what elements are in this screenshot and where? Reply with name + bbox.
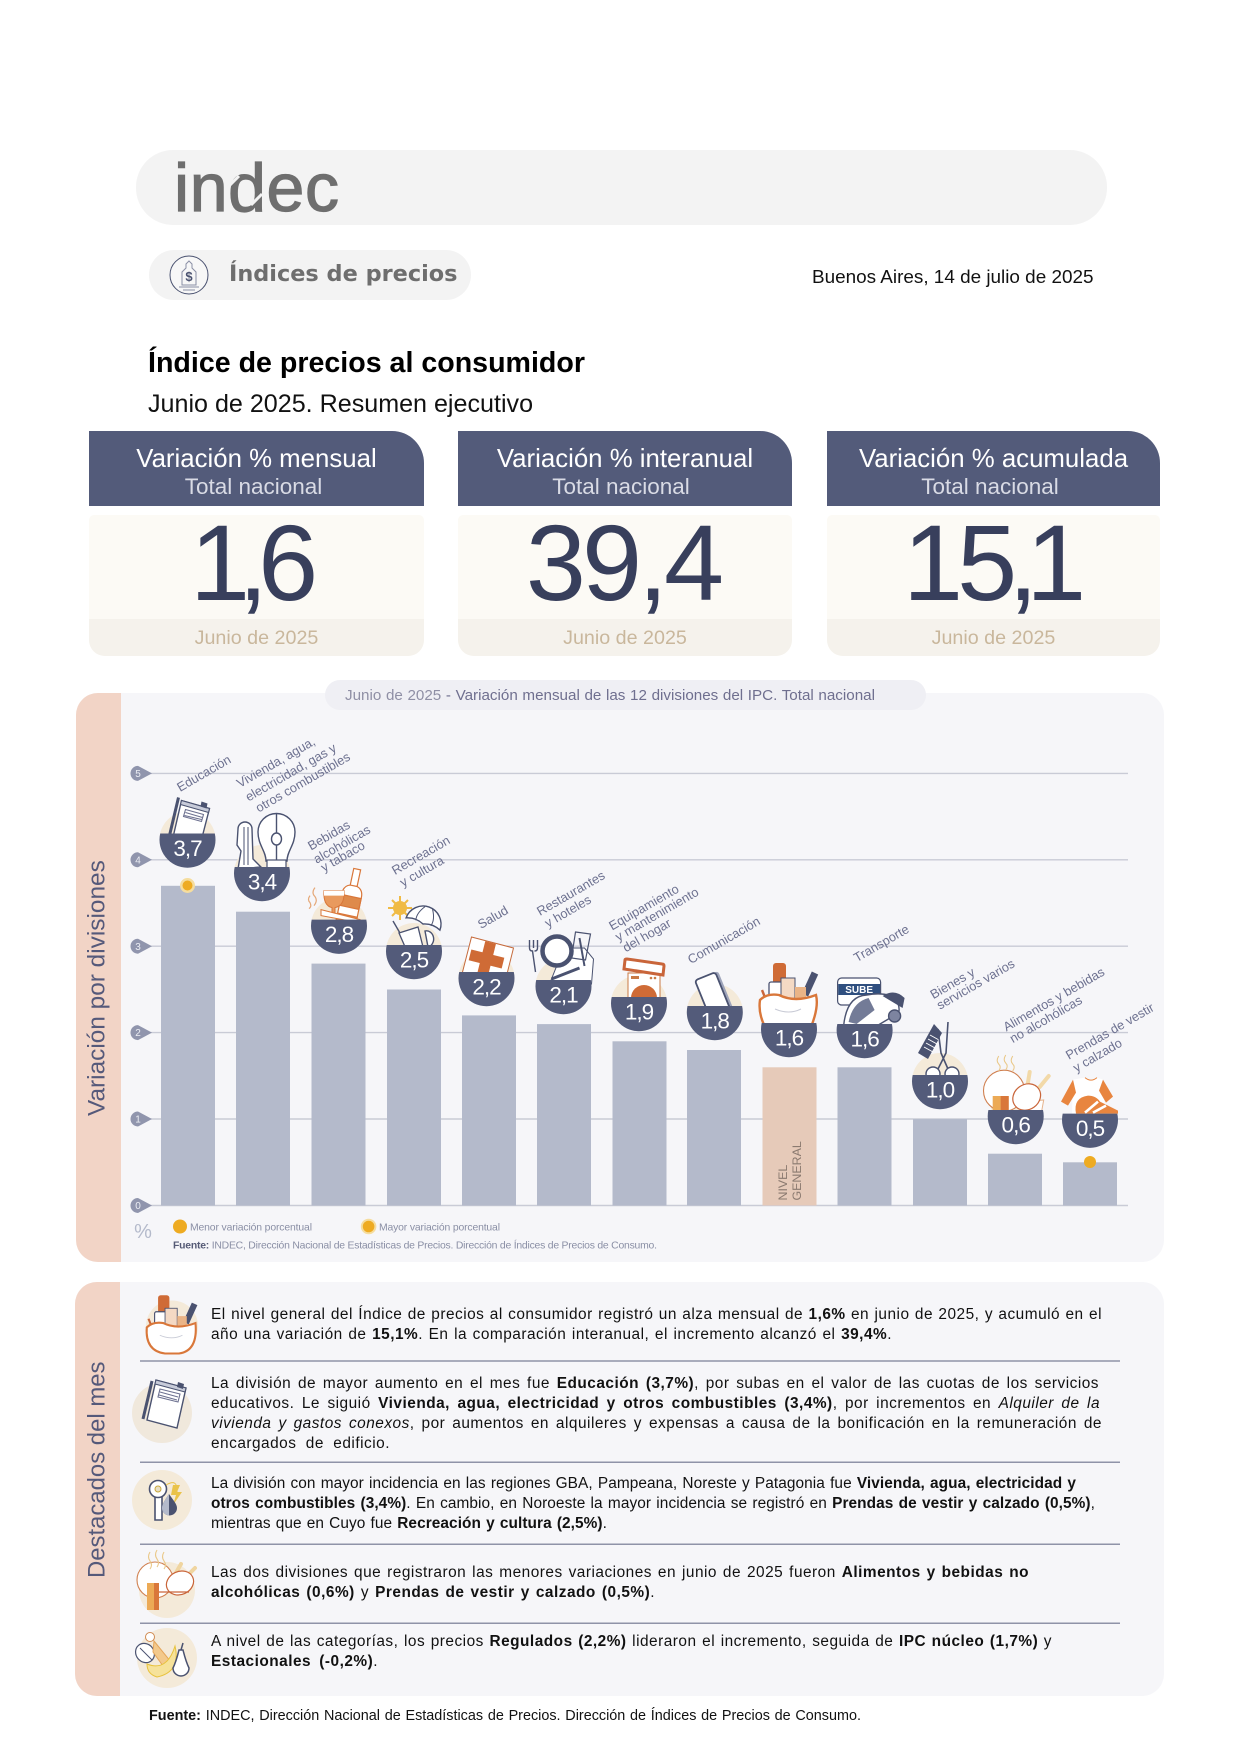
text: categorías: Estacionales (-0,2%). — [211, 1653, 378, 1670]
icon: notebook — [132, 1380, 192, 1443]
vertical heading: Variación por divisiones — [84, 860, 110, 1116]
division: Alimentos — [984, 1055, 1049, 1144]
label: Bebidas: alcohólicas — [311, 822, 373, 866]
label: Alimentos: no alcohólicas — [1007, 992, 1085, 1046]
text: mayor aumento — [211, 1375, 1102, 1452]
label: Comunicación: Comunicación — [685, 913, 763, 967]
date: Buenos Aires, 14 de julio de 2025 — [812, 267, 1093, 288]
legend: Menor variación porcentual — [190, 1222, 312, 1234]
y axis ticks — [131, 766, 152, 1213]
label: Transporte: Transporte — [851, 921, 912, 965]
text: nivel general: año una variación de 15,1%. En la comparación interanual, el incremento alcanzó el 39,4%. — [211, 1326, 892, 1343]
division: Equipamiento — [611, 959, 667, 1031]
title: Índice de precios al consumidor — [148, 347, 585, 379]
division: Recreación — [386, 896, 446, 979]
division: Restaurantes — [530, 932, 594, 1014]
card: interanual value: Junio de 2025 — [563, 627, 687, 649]
label: Prendas: y calzado — [1070, 1035, 1125, 1075]
division: Prendas: 0,5 — [1076, 1116, 1105, 1141]
y axis ticks: 3 — [135, 942, 141, 953]
card: acumulada header — [827, 431, 1160, 506]
division: Equipamiento: 1,9 — [625, 1000, 654, 1024]
bar label: nivel general: NIVEL — [776, 1165, 790, 1200]
card: interanual header: Total nacional — [552, 474, 690, 499]
text: categorías — [211, 1633, 1052, 1670]
subtitle: Junio de 2025. Resumen ejecutivo — [148, 390, 533, 418]
card: interanual header: Variación % interanual — [497, 445, 753, 473]
label: Vivienda: otros combustibles — [253, 749, 353, 815]
card: mensual header: Variación % mensual — [136, 445, 377, 473]
card: mensual value — [89, 515, 424, 656]
bar chart — [161, 886, 1117, 1206]
label: Vivienda — [234, 734, 353, 815]
marker: menor variación — [1084, 1156, 1096, 1168]
y axis ticks: 5 — [135, 769, 141, 780]
y axis ticks: 4 — [135, 855, 141, 866]
text: mayor incidencia: otros combustibles (3,4%). En cambio, en Noroeste la mayor incidencia se registró en Prendas de vestir y calzado (0,5%), — [211, 1495, 1095, 1512]
label: Equipamiento: Equipamiento — [606, 881, 681, 933]
division: Educación: 3,7 — [173, 836, 202, 861]
division: Recreación: 2,5 — [400, 948, 429, 972]
division: Salud — [458, 937, 514, 1006]
tag: Índices de precios — [149, 250, 471, 300]
text: nivel general — [211, 1305, 1102, 1343]
legend — [173, 1220, 500, 1234]
marker: mayor variación — [180, 878, 195, 893]
y axis ticks: 2 — [135, 1028, 141, 1039]
legend: Mayor variación porcentual — [379, 1222, 500, 1234]
label: Vivienda: electricidad, gas y — [243, 740, 339, 804]
y axis ticks: 0 — [135, 1201, 141, 1212]
label: Salud: Salud — [475, 902, 511, 932]
chart source: Fuente: INDEC, Dirección Nacional de Estadísticas de Precios. Dirección de Índices de Precios de Consumo. — [173, 1238, 657, 1252]
card: interanual header — [458, 431, 792, 506]
card: acumulada value: Junio de 2025 — [932, 627, 1055, 649]
division: Alimentos: 0,6 — [1002, 1112, 1030, 1138]
division: Vivienda — [234, 814, 295, 901]
card: mensual header: Total nacional — [185, 474, 322, 499]
label: Alimentos: Alimentos y bebidas — [1000, 964, 1107, 1034]
panel: destacados del mes — [75, 1282, 1164, 1696]
y axis ticks: 1 — [135, 1115, 141, 1126]
percent unit: % — [134, 1221, 152, 1243]
label: Bienes: Bienes y — [927, 964, 978, 1002]
text: categorías: A nivel de las categorías, los precios Regulados (2,2%) lideraron el incremento, seguida de IPC núcleo (1,7%) y — [211, 1633, 1052, 1650]
card: acumulada header: Variación % acumulada — [859, 445, 1128, 473]
chart subtitle pill — [325, 680, 926, 710]
division: Salud: 2,2 — [472, 974, 501, 1000]
division: Prendas — [1061, 1078, 1118, 1148]
division: Transporte — [837, 978, 905, 1058]
text: mayor incidencia — [211, 1475, 1095, 1532]
label: Restaurantes: Restaurantes — [534, 868, 607, 919]
division: Transporte: SUBE — [845, 985, 873, 996]
logo: indec: indec — [174, 150, 340, 226]
icon: fruit — [132, 1628, 197, 1688]
label: Recreación: Recreación — [389, 832, 453, 878]
label: Prendas: Prendas de vestir — [1063, 999, 1157, 1062]
division: Comunicación: 1,8 — [701, 1008, 729, 1034]
label: Vivienda: Vivienda, agua, — [234, 734, 318, 791]
card: mensual header — [89, 431, 424, 506]
division: Bienes: 1,0 — [926, 1078, 955, 1102]
division: Bienes — [912, 1022, 968, 1109]
division: Educación — [160, 798, 216, 868]
text: menores variaciones: Las dos divisiones que registraron las menores variaciones en junio de 2025 fueron Alimentos y bebidas no — [211, 1564, 1029, 1581]
label: Bebidas: y tabaco — [318, 838, 367, 875]
icon: basket — [146, 1295, 198, 1354]
card: acumulada header: Total nacional — [921, 474, 1059, 499]
label: Bebidas: Bebidas — [305, 817, 353, 853]
label: Restaurantes: y hoteles — [542, 892, 594, 930]
text: menores variaciones — [211, 1564, 1029, 1601]
label: Educación: Educación — [174, 752, 233, 795]
label: Recreación: y cultura — [397, 852, 447, 890]
text: mayor aumento: La división de mayor aumento en el mes fue Educación (3,7%), por subas en el valor de las cuotas de los servicios — [211, 1375, 1099, 1392]
division: Nivel general: 1,6 — [775, 1026, 804, 1050]
icon: food — [137, 1550, 198, 1618]
label: Equipamiento: y mantenimiento — [612, 884, 701, 944]
header bar with logo — [136, 150, 1107, 225]
card: acumulada value — [827, 515, 1160, 656]
bar label: nivel general — [776, 1141, 804, 1200]
division: Bebidas: 2,8 — [325, 922, 354, 947]
text: nivel general: El nivel general del Índice de precios al consumidor registró un alza mensual de 1,6% en junio de 2025, y acumuló en el — [211, 1306, 1102, 1323]
text: mayor aumento: educativos. Le siguió Vivienda, agua, electricidad y otros combustibles (3,4%), por incrementos en Alquiler de la — [211, 1395, 1100, 1412]
source: Fuente: INDEC, Dirección Nacional de Estadísticas de Precios. Dirección de Índices de Precios de Consumo. — [149, 1708, 861, 1724]
division: Nivel general — [760, 963, 817, 1057]
division: Vivienda: 3,4 — [248, 870, 277, 894]
icon: price tag — [170, 256, 208, 294]
text: mayor incidencia: mientras que en Cuyo fue Recreación y cultura (2,5%). — [211, 1515, 607, 1532]
icon: price tag: $ — [185, 269, 193, 284]
label: Equipamiento: del hogar — [620, 915, 674, 955]
division: Bebidas — [308, 867, 367, 954]
chart subtitle: Junio de 2025 - Variación mensual de las 12 divisiones del IPC. Total nacional — [345, 687, 875, 704]
text: mayor aumento: vivienda y gastos conexos, por aumentos en alquileres y expensas a causa de la bonificación en la remuneración de — [211, 1415, 1102, 1432]
tag text: Índices de precios — [229, 261, 457, 287]
text: mayor incidencia: La división con mayor incidencia en las regiones GBA, Pampeana, Noreste y Patagonia fue Vivienda, agua, electricidad y — [211, 1475, 1076, 1492]
icon: keys — [132, 1470, 192, 1530]
bar label: nivel general: GENERAL — [790, 1141, 804, 1200]
vertical heading: Destacados del mes — [84, 1361, 110, 1578]
division: Transporte: 1,6 — [850, 1026, 879, 1052]
card: interanual value — [458, 515, 792, 656]
panel: variación por divisiones — [76, 693, 1164, 1262]
division: Restaurantes: 2,1 — [549, 982, 578, 1008]
label: Bienes: servicios varios — [934, 956, 1017, 1012]
text: mayor aumento: encargados de edificio. — [211, 1435, 390, 1452]
division: Comunicación — [687, 971, 743, 1040]
card: mensual value: Junio de 2025 — [195, 627, 318, 649]
text: menores variaciones: alcohólicas (0,6%) y Prendas de vestir y calzado (0,5%). — [211, 1584, 655, 1601]
